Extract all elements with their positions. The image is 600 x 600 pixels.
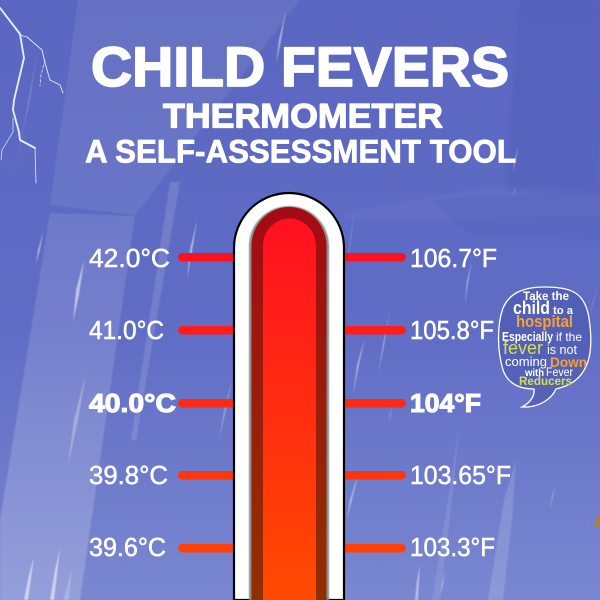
- icon: lightning bolt: [0, 8, 63, 183]
- celsius scale labels: 39.8°C: [89, 462, 168, 490]
- celsius scale labels: 39.6°C: [89, 534, 166, 562]
- callout text: with: [524, 367, 544, 379]
- callout text: Reducers: [519, 374, 572, 388]
- fahrenheit scale labels: [410, 245, 511, 562]
- thermometer: [234, 193, 344, 600]
- callout text: Fever: [546, 367, 573, 379]
- callout text: hospital: [516, 312, 573, 331]
- heading: a self-assessment tool: A SELF-ASSESSMENT TOOL: [85, 134, 516, 170]
- fahrenheit scale labels: 103.3°F: [410, 534, 495, 562]
- celsius scale labels: 42.0°C: [89, 245, 170, 273]
- callout text: child: [513, 298, 550, 318]
- callout: speech bubble: [498, 287, 591, 407]
- fahrenheit scale labels: 103.65°F: [410, 462, 511, 490]
- fahrenheit scale labels: 105.8°F: [410, 317, 494, 345]
- mercury column: [263, 218, 316, 600]
- fahrenheit scale labels: 104°F: [410, 390, 481, 418]
- callout text: Take the: [523, 289, 569, 303]
- heading: child fevers: CHILD FEVERS: [91, 35, 509, 98]
- callout text: Especially: [502, 330, 553, 344]
- callout text: coming: [505, 354, 547, 369]
- fahrenheit scale labels: 106.7°F: [410, 245, 497, 273]
- callout text: to a: [553, 305, 574, 317]
- callout text: [502, 289, 587, 388]
- callout text: Down: [550, 354, 587, 370]
- heading: thermometer: THERMOMETER: [163, 98, 443, 136]
- celsius scale labels: 41.0°C: [89, 317, 164, 345]
- callout text: fever: [503, 338, 543, 358]
- title: [85, 35, 516, 170]
- celsius scale labels: [89, 245, 176, 562]
- callout text: is not: [547, 342, 577, 357]
- tick marks: [178, 253, 406, 552]
- celsius scale labels: 40.0°C: [89, 390, 176, 418]
- icon: brown shape at right edge: [594, 512, 600, 527]
- callout text: if the: [556, 330, 582, 344]
